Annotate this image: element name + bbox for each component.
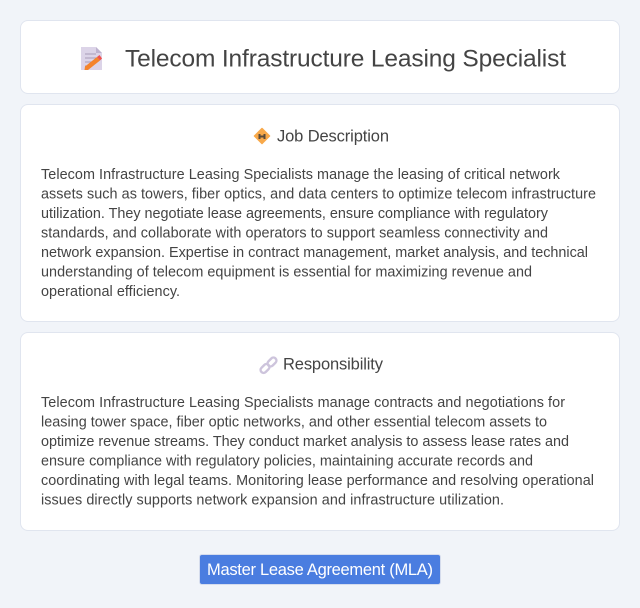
text: job description body: operational efficiency.	[41, 284, 180, 300]
title: Telecom Infrastructure Leasing Specialist	[125, 46, 566, 72]
heading: responsibility: Responsibility	[283, 356, 384, 374]
text: job description body: assets such as towers, fiber optics, and data centers to optimize telecom infrastructure	[41, 186, 596, 202]
call to action button	[199, 554, 441, 585]
text: job description body: network expansion. Expertise in contract management, market analysis, and technical	[41, 245, 588, 261]
text: job description body	[41, 167, 596, 300]
text: responsibility body: optimize revenue streams. They conduct market analysis to assess lease rates and	[41, 434, 569, 450]
text: job description body: utilization. They negotiate lease agreements, ensure compliance with regulatory	[41, 206, 549, 222]
text: responsibility body: coordinating with legal teams. Monitoring lease performance and resolving operational	[41, 473, 594, 489]
button label: Master Lease Agreement (MLA)	[207, 561, 433, 579]
panel: responsibility card	[20, 332, 620, 531]
text: job description body: standards, and collaborate with operators to support seamless connectivity and	[41, 226, 548, 242]
icon: diamond warning sign	[254, 128, 270, 144]
panel: job description card	[20, 104, 620, 322]
text: job description body: understanding of telecom equipment is essential for maximizing revenue and	[41, 264, 532, 280]
heading: job description: Job Description	[277, 128, 389, 146]
text: responsibility body: leasing tower space, fiber optic networks, and other essential telecom assets to	[41, 414, 547, 430]
icon: chain link	[259, 356, 278, 374]
text: responsibility body: issues directly supports network expansion and infrastructure utilization.	[41, 492, 504, 508]
panel: title card	[20, 20, 620, 94]
text: responsibility body: ensure compliance with regulatory policies, maintaining accurate records and	[41, 454, 533, 470]
text: job description body: Telecom Infrastructure Leasing Specialists manage the leasing of critical network	[41, 167, 561, 183]
text: responsibility body	[41, 395, 594, 508]
text: responsibility body: Telecom Infrastructure Leasing Specialists manage contracts and negotiations for	[41, 395, 565, 411]
icon: document with pencil	[81, 47, 102, 70]
